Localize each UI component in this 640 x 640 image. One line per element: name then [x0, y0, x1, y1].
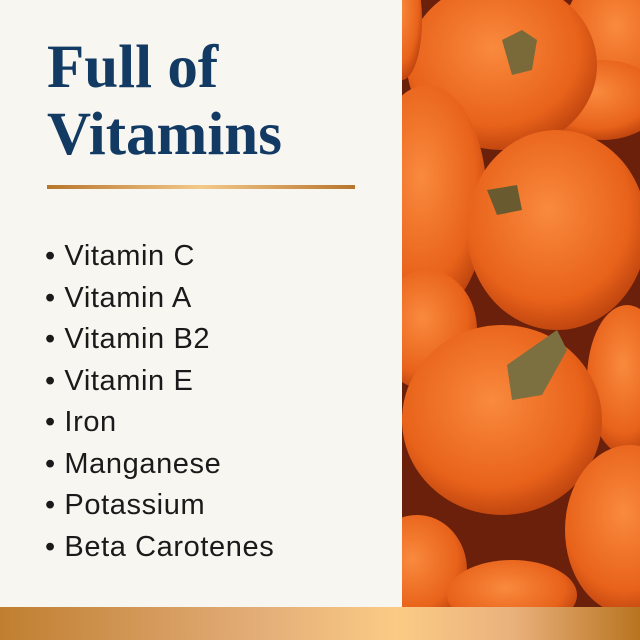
vitamin list: • Manganese: [45, 448, 221, 480]
vitamin list: • Vitamin B2: [45, 323, 210, 355]
pumpkin photo: [402, 0, 640, 607]
vitamin list: • Vitamin E: [45, 364, 193, 396]
vitamin list: • Vitamin A: [45, 282, 192, 314]
title: Vitamins: [47, 101, 282, 168]
vitamin list: • Vitamin C: [45, 240, 195, 272]
title: Full of: [47, 34, 218, 101]
vitamin list: [45, 240, 274, 562]
title: [47, 34, 282, 168]
divider: [47, 185, 355, 189]
vitamin list: • Beta Carotenes: [45, 530, 274, 562]
vitamin list: • Iron: [45, 406, 117, 438]
vitamin list: • Potassium: [45, 489, 205, 521]
bottom gold bar: [0, 607, 640, 640]
